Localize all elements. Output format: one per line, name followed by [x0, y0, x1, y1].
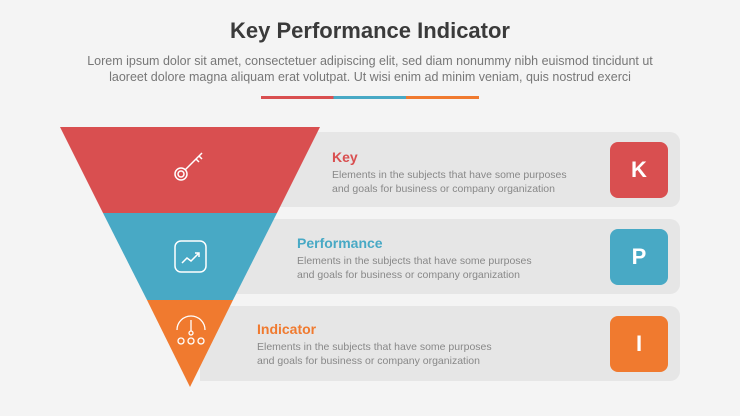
badge I: I — [636, 331, 642, 356]
text: and goals for business or company organization — [332, 183, 555, 195]
subtitle: laoreet dolore magna aliquam erat volutpat. Ut wisi enim ad minim veniam, quis nostrud exerci — [109, 70, 631, 84]
icon: gauge — [177, 316, 205, 344]
icon: key — [175, 153, 202, 180]
tricolor line — [261, 96, 479, 99]
text: and goals for business or company organization — [297, 269, 520, 281]
icon: chart — [175, 241, 206, 272]
badge P: P — [632, 244, 646, 269]
text: Elements in the subjects that have some purposes — [257, 341, 492, 353]
text: indicator: Indicator — [257, 321, 316, 337]
text: Elements in the subjects that have some purposes — [332, 169, 567, 181]
text: performance: Performance — [297, 235, 383, 251]
badge I — [610, 316, 668, 372]
text: Elements in the subjects that have some purposes — [297, 255, 532, 267]
subtitle — [87, 54, 653, 84]
subtitle: Lorem ipsum dolor sit amet, consectetuer adipiscing elit, sed diam nonummy nibh euismod tincidunt ut — [87, 54, 653, 68]
row: key — [200, 132, 680, 207]
text: and goals for business or company organization — [257, 355, 480, 367]
row: indicator — [200, 306, 680, 381]
title: Key Performance Indicator — [230, 18, 510, 43]
badge K: K — [631, 157, 647, 182]
badge K — [610, 142, 668, 198]
text: key: Key — [332, 149, 358, 165]
row: performance — [200, 219, 680, 294]
badge P — [610, 229, 668, 285]
